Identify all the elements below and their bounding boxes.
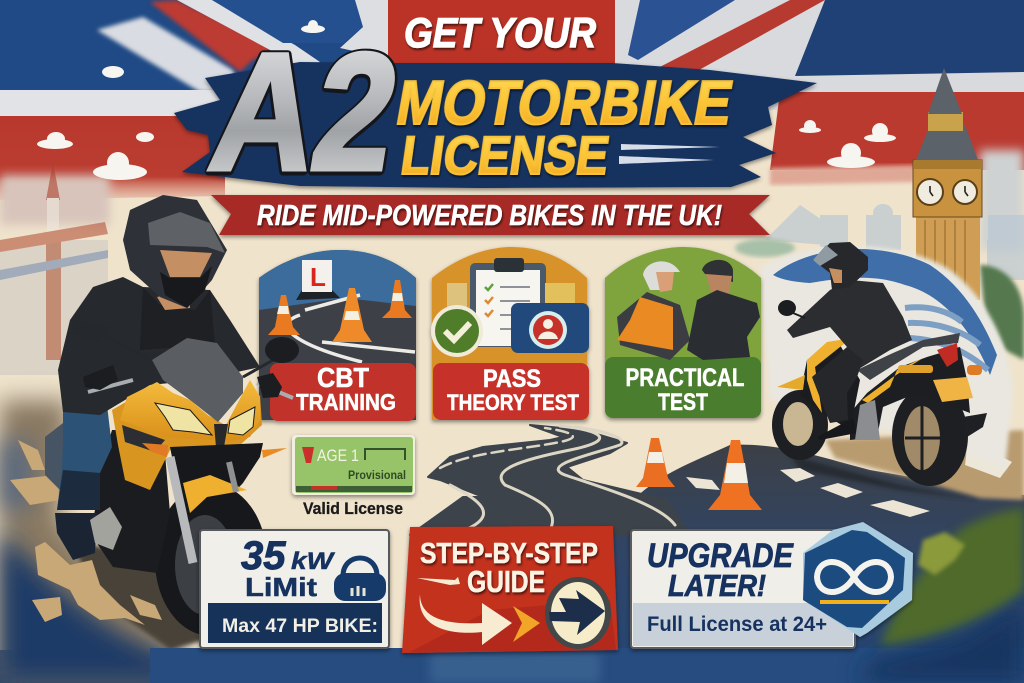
distant skyline right (765, 204, 1024, 280)
mirrors (72, 320, 110, 343)
power text: 35 (241, 534, 286, 578)
left lower shading (0, 400, 210, 683)
jacket (787, 280, 912, 370)
panel: pass theory test (431, 247, 589, 420)
subtitle text: RIDE MID-POWERED BIKES IN THE UK! (257, 200, 722, 232)
dark shadow under bike (70, 540, 205, 650)
front wheel (772, 390, 828, 460)
LICENSE heading: LICENSE (397, 126, 613, 186)
callout: upgrade later: UPGRADE (647, 537, 794, 575)
callout: 35 kW limit (200, 530, 389, 648)
traffic cones (268, 280, 412, 342)
front cowl (170, 443, 263, 500)
panel: CBT training: CBT (317, 362, 369, 393)
dark road shadow (790, 455, 980, 500)
CBT label (270, 363, 416, 421)
engine and frame (90, 430, 170, 573)
fairing base (112, 385, 262, 490)
GET YOUR heading: GET YOUR (404, 9, 597, 56)
winding road (410, 425, 690, 535)
foliage bottom right (880, 508, 1024, 645)
road cones (636, 438, 762, 510)
provisional licence card (292, 435, 415, 495)
panel: CBT training: TRAINING (296, 389, 396, 415)
mirror (778, 300, 796, 316)
callout: step-by-step guide (402, 526, 618, 653)
valid license caption: Valid License (303, 499, 403, 518)
bottom base (0, 650, 1024, 683)
A2 chrome lettering: A2 (200, 20, 410, 205)
foliage right of tower (980, 265, 1024, 360)
rear wheel (892, 386, 968, 486)
rear helmet (813, 242, 868, 290)
exhaust (963, 413, 987, 437)
illustration: rider on motorbike, right (772, 242, 987, 486)
callout: step-by-step guide: STEP-BY-STEP (420, 538, 598, 570)
A2 chrome lettering: A2 (200, 21, 410, 206)
helmet (123, 195, 227, 308)
MOTORBIKE heading: MOTORBIKE (392, 68, 738, 138)
icon: round arrow badge (545, 577, 611, 649)
handlebars and gloves (88, 380, 293, 398)
flag right (610, 0, 1024, 250)
icon: infinity hexagon badge (803, 522, 913, 637)
callout: upgrade later: LATER! (668, 568, 766, 603)
headlights (155, 403, 212, 435)
callout: 35 kW limit: kW (291, 548, 336, 575)
callout: 35 kW limit: LiMit (245, 572, 317, 602)
illustration: rider on motorbike, foreground left (45, 195, 299, 636)
L plate: L (310, 262, 326, 292)
provisional licence card: AGE 1 (317, 446, 359, 465)
icon: engine limiter (334, 558, 386, 601)
tan patch behind rear wheel (825, 430, 1024, 500)
callout: step-by-step guide: GUIDE (467, 564, 545, 599)
panel: practical test (605, 247, 761, 418)
title block (174, 0, 817, 235)
jeans (57, 405, 112, 510)
globe arc (760, 246, 1013, 470)
examiner and rider (617, 260, 760, 360)
panel: pass theory test: PASS (483, 365, 541, 393)
blue case icon (511, 303, 589, 353)
provisional licence card: Provisional (348, 468, 406, 482)
panel: CBT training (259, 250, 416, 421)
L plate (296, 260, 340, 300)
callout: 35 kW limit: Max 47 HP BIKE: (222, 616, 378, 637)
legs (812, 347, 863, 423)
fairing yellow (120, 382, 217, 440)
clipboard (470, 258, 546, 347)
callout: upgrade later (631, 522, 913, 648)
subtitle ribbon (211, 195, 770, 235)
bottom blue band (150, 648, 1024, 683)
flag left (0, 0, 410, 225)
icon: Big Ben clock tower (913, 68, 982, 300)
sky clouds (37, 20, 896, 180)
mudguard (183, 475, 247, 513)
theory label (433, 363, 589, 420)
pannier (45, 423, 67, 490)
check badge (431, 305, 483, 357)
jacket (58, 277, 260, 415)
tan dirt splashes (10, 440, 162, 625)
left tower (0, 162, 108, 375)
front wheel (155, 484, 267, 636)
red GET YOUR panel (388, 0, 615, 66)
practical text: PRACTICAL (626, 364, 744, 392)
navy corner (860, 600, 1024, 683)
icon: cream arrow (417, 577, 540, 645)
fork (170, 457, 193, 563)
callout: upgrade later: Full License at 24+ (647, 613, 827, 636)
lane dashes (686, 468, 930, 517)
engine cover (90, 507, 122, 550)
panel: practical test: TEST (658, 389, 708, 416)
panel: pass theory test: THEORY TEST (447, 390, 579, 415)
navy banner (174, 62, 817, 188)
boot (55, 513, 97, 560)
road ground right (610, 445, 1024, 683)
windscreen (152, 338, 243, 422)
speed lines (619, 144, 720, 164)
bike body (850, 347, 970, 440)
